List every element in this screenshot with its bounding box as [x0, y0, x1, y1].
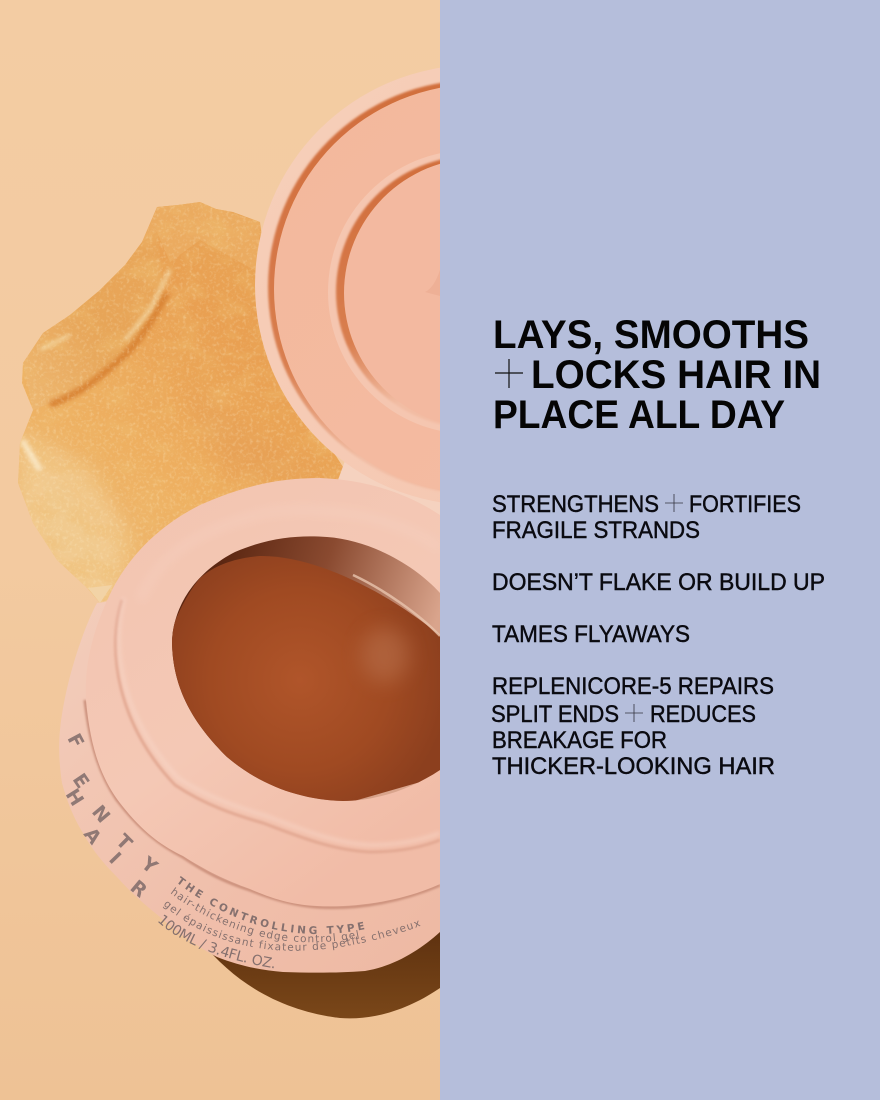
jar logo FENTY HAIR: H [61, 785, 88, 810]
jar label text [158, 876, 420, 968]
lid inner disc [344, 164, 440, 394]
heading: PLACE ALL DAY [493, 393, 785, 437]
jar opening [172, 536, 440, 801]
benefit: strengthens: FRAGILE STRANDS [492, 517, 700, 544]
jar shadow [212, 932, 440, 1018]
heading plus sign [495, 359, 523, 388]
panel: benefits [440, 0, 880, 1100]
jar logo FENTY HAIR: N [87, 801, 114, 827]
lid flat ring [274, 88, 440, 445]
heading [493, 313, 821, 437]
lid hinge [338, 462, 440, 515]
gel pale edge under jar [88, 585, 112, 603]
jar logo FENTY HAIR: Y [136, 852, 161, 879]
jar label text: gel épaississant fixateur de petits cheveux [162, 902, 420, 951]
jar collar [86, 478, 440, 906]
jar logo FENTY HAIR: E [68, 769, 93, 793]
benefit: replenicore: THICKER-LOOKING HAIR [492, 753, 775, 780]
jar logo FENTY HAIR [66, 733, 160, 898]
heading: LOCKS HAIR IN [531, 353, 821, 397]
jar collar ridge [115, 600, 440, 852]
benefit: flyaways: TAMES FLYAWAYS [492, 621, 690, 648]
benefit: replenicore: SPLIT ENDS [491, 701, 619, 728]
benefit: no flake: DOESN’T FLAKE OR BUILD UP [492, 569, 825, 596]
panel: product photo [0, 0, 440, 1100]
gel swatch [18, 202, 343, 602]
benefit: strengthens: STRENGTHENS [492, 491, 659, 518]
jar logo FENTY HAIR: R [126, 876, 151, 902]
jar label text: hair-thickening edge control gel [170, 887, 359, 942]
benefit: strengthens [492, 491, 801, 544]
jar label text: THE CONTROLLING TYPE [178, 876, 364, 934]
benefit: replenicore [491, 673, 775, 780]
compact lid [255, 68, 440, 515]
lid inner well rim [328, 154, 440, 430]
jar base body [59, 600, 440, 973]
jar label text: 100ML / 3.4FL. OZ. [158, 914, 274, 968]
benefit: strengthens: FORTIFIES [689, 491, 801, 518]
jar [59, 478, 440, 973]
jar logo FENTY HAIR: I [104, 848, 125, 869]
lid groove [266, 82, 440, 491]
gel surface in jar [160, 556, 445, 805]
jar seam shadow [85, 700, 440, 908]
benefit: replenicore: REPLENICORE-5 REPAIRS [492, 673, 774, 700]
jar logo FENTY HAIR: F [63, 730, 88, 752]
lid outer rim [255, 68, 440, 502]
jar logo FENTY HAIR: T [111, 830, 136, 855]
benefit: replenicore: REDUCES [650, 701, 756, 728]
benefit: replenicore: BREAKAGE FOR [492, 727, 667, 754]
jar logo FENTY HAIR: A [79, 824, 106, 849]
heading: LAYS, SMOOTHS [493, 313, 809, 357]
